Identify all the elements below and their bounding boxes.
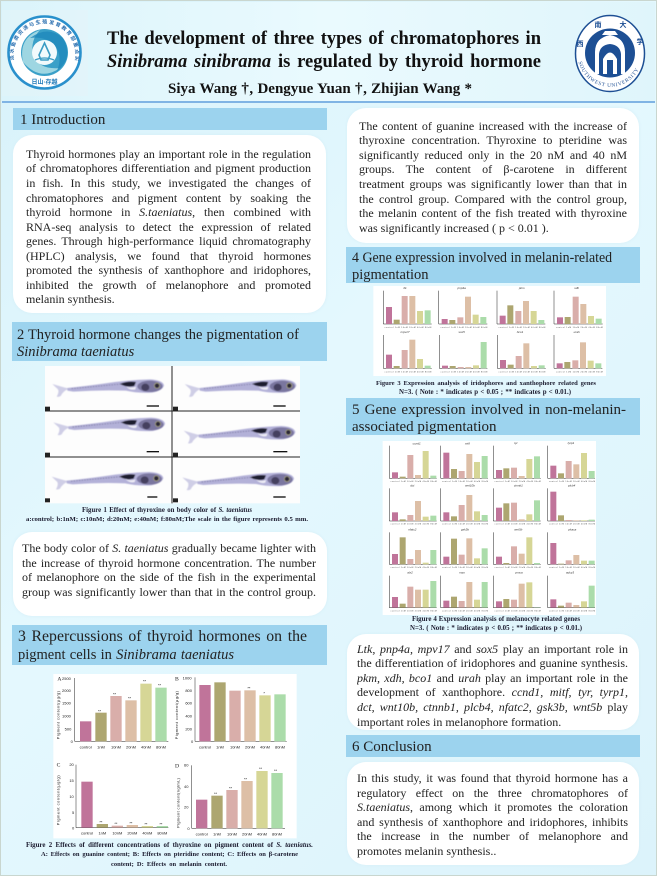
chart: pkaca: control 1nM 10nM 20nM 40nM 80nM bbox=[549, 566, 595, 569]
chart: wnt5b: wnt5b bbox=[514, 528, 523, 532]
chart: ccnd1: ccnd1 bbox=[413, 441, 421, 445]
chart D: melanin: D bbox=[175, 764, 179, 770]
chart: alx2: alx2 bbox=[407, 571, 413, 575]
chart: plcb4 bbox=[548, 484, 595, 526]
chart B: pteridine: B bbox=[175, 677, 179, 683]
chart C: beta-carotene: ** bbox=[159, 821, 163, 826]
heading: 5 Gene expression non-melanin bbox=[346, 398, 640, 435]
panel: introduction text: inhibited the growth of melanophore and promoted bbox=[26, 278, 311, 292]
heading: 3 Repercussions of thyroid hormones bbox=[12, 625, 327, 665]
chart B: pteridine: 400 bbox=[185, 714, 193, 719]
panel: gene roles text: the differentiation of iridophores and guanine synthesis. bbox=[357, 656, 628, 670]
chart C: beta-carotene: Pigment content(μg/g) bbox=[55, 775, 60, 825]
chart: pkaca bbox=[548, 528, 595, 569]
chart: mpv17 bbox=[383, 330, 432, 373]
caption: figure 2: A: Effects on guanine content; B: Effects on pteridine content; C: Effects on β-carotene bbox=[41, 851, 298, 858]
chart D: melanin: 10nM bbox=[227, 831, 237, 836]
caption: figure 3: N=3. ( Note : * indicates p < 0.05 ; ** indicates p < 0.01.) bbox=[399, 389, 571, 396]
caption: figure 1: Figure 1 Effect of thyroxine on body color of S. taeniatus bbox=[82, 507, 252, 514]
chart A: guanine: 1500 bbox=[62, 701, 72, 706]
chart: tyrp1: control 1nM 10nM 20nM 40nM 80nM bbox=[549, 480, 595, 483]
chart B: pteridine: 600 bbox=[185, 701, 193, 706]
panel: gene roles text: dct, wnt10b, ctnnb1, plcb4, nfatc2, gsk3b, wnt5b play bbox=[357, 700, 628, 714]
chart: wnt10b: wnt10b bbox=[465, 484, 475, 488]
chart A: guanine: A bbox=[57, 677, 62, 683]
heading: 2 Thyroid hormone changes the pigmentation: 2 Thyroid hormone changes the pigmentation of bbox=[17, 327, 299, 343]
chart C: beta-carotene: 20nM bbox=[127, 831, 137, 836]
heading: 3 Repercussions of thyroid hormones: pigment cells in Sinibrama taeniatus bbox=[18, 647, 234, 663]
caption: figure 4 bbox=[410, 616, 582, 632]
chart: pmca: pmca bbox=[514, 571, 523, 575]
chart: ccnd1: control 1nM 10nM 20nM 40nM 80nM bbox=[391, 480, 437, 483]
chart: wnt10b: control 1nM 10nM 20nM 40nM 80nM bbox=[442, 523, 488, 526]
panel: conclusion text: promotes melanin synthesis.. bbox=[357, 844, 496, 858]
chart: myo: myo bbox=[459, 571, 465, 575]
panel: pigment content text: groups. The content of β-carotene in different bbox=[359, 162, 627, 176]
panel: pigment content text: treatment groups was significantly lower than that in bbox=[359, 177, 627, 191]
heading: 4 Gene expression melanin-related: 4 Gene expression involved in melanin-related bbox=[352, 250, 612, 266]
chart: bco1: bco1 bbox=[517, 330, 524, 334]
chart C: beta-carotene: 5 bbox=[72, 810, 75, 815]
panel: pigment content text: significantly reduced only in the 20 nM and 40 nM bbox=[359, 148, 627, 162]
chart A: guanine: 20nM bbox=[126, 744, 136, 749]
panel a fish bbox=[45, 379, 164, 411]
chart: wnt10b bbox=[441, 484, 488, 526]
chart: mpv17: mpv17 bbox=[400, 330, 410, 334]
icon: Southwest University logo: 大 bbox=[620, 20, 626, 29]
chart D: melanin: 0 bbox=[187, 826, 190, 831]
chart D: melanin: control bbox=[196, 831, 208, 836]
chart A: guanine: Pigment content(μg/g) bbox=[55, 690, 60, 739]
panel: conclusion text: S.taeniatus, among which it promotes the coloration bbox=[357, 800, 628, 814]
icon: Southwest University logo: 西 bbox=[576, 40, 584, 48]
chart C: beta-carotene: 80nM bbox=[157, 831, 167, 836]
heading: 2 Thyroid hormone changes the pigmentation bbox=[12, 322, 327, 361]
chart C: beta-carotene: ** bbox=[99, 819, 103, 824]
chart: nfatc2: nfatc2 bbox=[408, 528, 417, 532]
chart: pkm: pkm bbox=[518, 286, 525, 290]
chart: gsk3b: control 1nM 10nM 20nM 40nM 80nM bbox=[442, 566, 488, 569]
panel: pigment content text bbox=[347, 108, 639, 243]
panel: body colour text: of melanophore on the side of the fish in the experimental bbox=[22, 570, 316, 584]
chart D: melanin: 40 bbox=[184, 784, 189, 789]
figure 4: melanocyte gene charts bbox=[382, 441, 596, 615]
chart D: melanin: 40nM bbox=[257, 831, 267, 836]
chart C: beta-carotene: 0 bbox=[72, 825, 75, 830]
chart: myo: control 1nM 10nM 20nM 40nM 80nM bbox=[442, 610, 488, 613]
panel: introduction text bbox=[13, 135, 326, 313]
panel: body colour text bbox=[13, 532, 327, 616]
chart C: beta-carotene: 15 bbox=[69, 778, 75, 783]
chart B: pteridine: * bbox=[263, 691, 265, 696]
chart: mitf: control 1nM 10nM 20nM 40nM 80nM bbox=[442, 480, 488, 483]
chart: nfatc2: control 1nM 10nM 20nM 40nM 80nM bbox=[391, 566, 437, 569]
chart C: beta-carotene: ** bbox=[129, 820, 133, 825]
chart: tyr: tyr bbox=[514, 441, 519, 445]
chart D: melanin: 20nM bbox=[242, 831, 252, 836]
heading: 5 Gene expression non-melanin: 5 Gene expression involved in non-melanin- bbox=[352, 402, 626, 418]
heading: 1 Introduction: 1 Introduction bbox=[20, 112, 105, 128]
caption: figure 2: content; D: Effects on melanin content. bbox=[111, 861, 227, 868]
icon: Southwest University logo bbox=[574, 14, 646, 92]
chart A: guanine: 1nM bbox=[97, 744, 105, 749]
figure 1: fish photographs bbox=[45, 366, 300, 504]
chart B: pteridine: 200 bbox=[185, 726, 193, 731]
chart D: melanin: ** bbox=[259, 766, 263, 771]
chart B: pteridine: 800 bbox=[185, 688, 193, 693]
chart D: melanin bbox=[175, 763, 285, 836]
icon: laboratory logo bbox=[7, 15, 82, 90]
chart: pnp4a bbox=[439, 286, 488, 329]
panel f fish bbox=[173, 473, 294, 502]
chart: wnt5b: control 1nM 10nM 20nM 40nM 80nM bbox=[495, 566, 541, 569]
chart B: pteridine: 1nM bbox=[216, 744, 224, 749]
icon: Southwest University logo: 南 bbox=[594, 20, 602, 29]
chart: pmca: control 1nM 10nM 20nM 40nM 80nM bbox=[495, 610, 541, 613]
chart D: melanin: ** bbox=[229, 785, 233, 790]
chart D: melanin: 60 bbox=[184, 763, 189, 768]
chart D: melanin: 1nM bbox=[213, 831, 221, 836]
chart: adcy3: adcy3 bbox=[566, 571, 574, 575]
panel: pigment content text: thyroxine concentration. Thyroxine to pteridine was bbox=[359, 133, 627, 147]
panel: body colour text: the increase of thyroid hormone concentration. The number bbox=[22, 556, 316, 570]
panel: body colour text: group was significantly lower than that in the control group. bbox=[22, 585, 316, 599]
chart B: pteridine: 1000 bbox=[183, 675, 192, 680]
heading: 6 Conclusion bbox=[346, 735, 640, 757]
heading: 4 Gene expression melanin-related bbox=[346, 247, 640, 283]
chart: pnp4a: pnp4a bbox=[456, 286, 466, 290]
chart: ctnnb1: control 1nM 10nM 20nM 40nM 80nM bbox=[495, 523, 541, 526]
chart A: guanine: 40nM bbox=[141, 744, 151, 749]
chart: nfatc2 bbox=[389, 528, 437, 569]
panel: gene roles text: development of xanthophore. ccnd1, mitf, tyr, tyrp1, bbox=[357, 685, 628, 699]
chart: urah: control 1nM 10nM 20nM 40nM 80nM bbox=[556, 370, 603, 373]
chart: tyrp1 bbox=[548, 441, 595, 483]
chart: dct: control 1nM 10nM 20nM 40nM 80nM bbox=[391, 523, 437, 526]
chart: bco1 bbox=[497, 330, 546, 373]
chart: gsk3b bbox=[441, 528, 488, 569]
chart A: guanine: 80nM bbox=[156, 744, 166, 749]
chart A: guanine: ** bbox=[98, 708, 102, 713]
chart A: guanine: 10nM bbox=[111, 744, 121, 749]
chart: tyrp1: tyrp1 bbox=[567, 441, 575, 445]
panel: conclusion text bbox=[347, 762, 639, 865]
panel b fish bbox=[45, 418, 165, 457]
caption: figure 3 bbox=[376, 380, 596, 396]
caption: figure 1: a:control; b:1nM; c:10nM; d:20nM; e:40nM; f:80nM;The scale in the figure represents 0.5 mm. bbox=[26, 516, 308, 523]
chart B: pteridine: control bbox=[199, 744, 211, 749]
chart B: pteridine: 10nM bbox=[230, 744, 240, 749]
panel: pigment content text: was significantly increased ( p < 0.01 ). bbox=[359, 221, 549, 235]
chart: adcy3 bbox=[548, 571, 595, 613]
chart: myo bbox=[441, 571, 488, 613]
figure 2: pigment content bar charts bbox=[53, 674, 297, 838]
panel: gene roles text bbox=[347, 634, 639, 730]
heading: 2 Thyroid hormone changes the pigmentation: Sinibrama taeniatus bbox=[17, 344, 134, 360]
heading: 6 Conclusion: 6 Conclusion bbox=[352, 739, 432, 755]
chart: dct bbox=[389, 484, 437, 526]
chart D: melanin: ** bbox=[214, 791, 218, 796]
chart: bco1: control 1nM 10nM 20nM 40nM 80nM bbox=[499, 370, 546, 373]
panel: gene roles text: pkm, xdh, bco1 and urah play an important role in the bbox=[357, 671, 628, 685]
chart C: beta-carotene: ** bbox=[144, 821, 148, 826]
chart B: pteridine: 40nM bbox=[260, 744, 270, 749]
caption: figure 2 bbox=[26, 842, 313, 868]
chart A: guanine: 1000 bbox=[62, 714, 72, 719]
chart: pkm bbox=[497, 286, 546, 329]
chart C: beta-carotene bbox=[55, 762, 168, 836]
title: The development of three types of chromatophores in bbox=[107, 29, 541, 49]
chart: ltk: ltk bbox=[404, 286, 407, 290]
chart: pkm: control 1nM 10nM 20nM 40nM 80nM bbox=[499, 326, 546, 329]
chart B: pteridine: 20nM bbox=[245, 744, 255, 749]
chart: alx2: control 1nM 10nM 20nM 40nM 80nM bbox=[391, 610, 437, 613]
panel: introduction text: melanin synthesis. bbox=[26, 292, 115, 306]
chart B: pteridine: 80nM bbox=[275, 744, 285, 749]
heading: 4 Gene expression melanin-related: pigmentation bbox=[352, 267, 429, 283]
chart B: pteridine: 0 bbox=[191, 739, 194, 744]
icon: laboratory logo: 日山·存越 bbox=[32, 78, 58, 86]
panel: conclusion text: and synthesis of xanthophore and iridophores, inhibits bbox=[357, 815, 628, 829]
caption: figure 4: Figure 4 Expression analysis of melanocyte related genes bbox=[412, 616, 580, 623]
heading: 1 Introduction bbox=[13, 108, 327, 130]
chart: gsk3b: gsk3b bbox=[461, 528, 469, 532]
chart: sox5: sox5 bbox=[458, 330, 465, 334]
chart: ltk bbox=[383, 286, 432, 329]
caption: figure 3: Figure 3 Expression analysis of iridophores and xanthophore related genes bbox=[376, 380, 596, 387]
chart: mitf: mitf bbox=[465, 441, 471, 445]
caption: figure 4: N=3. ( Note : * indicates p < 0.05 ; ** indicates p < 0.01.) bbox=[410, 625, 582, 632]
panel: gene roles text: Ltk, pnp4a, mpv17 and sox5 play an important role in bbox=[357, 642, 628, 656]
panel: conclusion text: regulatory effect on the three chromatophores of bbox=[357, 786, 628, 800]
chart C: beta-carotene: 1nM bbox=[98, 831, 106, 836]
chart A: guanine: ** bbox=[158, 683, 162, 688]
heading: 5 Gene expression non-melanin: associated pigmentation bbox=[352, 419, 497, 435]
caption: figure 1 bbox=[26, 507, 308, 523]
chart: adcy3: control 1nM 10nM 20nM 40nM 80nM bbox=[549, 610, 595, 613]
authors: Siya Wang †, Dengyue Yuan †, Zhijian Wang * bbox=[168, 81, 472, 97]
chart B: pteridine: Pigment content(μg/g) bbox=[174, 690, 179, 739]
panel: introduction text: Thyroid hormones play an important role in the regulation bbox=[26, 147, 311, 161]
panel: gene roles text: important roles in melanophore formation. bbox=[357, 715, 561, 729]
panel: conclusion text: In this study, it was found that thyroid hormone has a bbox=[357, 771, 628, 785]
chart: xdh bbox=[554, 286, 603, 329]
chart C: beta-carotene: C bbox=[57, 763, 61, 769]
chart: xdh: xdh bbox=[573, 286, 579, 290]
chart: sox5 bbox=[439, 330, 488, 373]
panel: pigment content text: the control group. Compared with the control group, bbox=[359, 192, 627, 206]
header band bbox=[2, 2, 655, 103]
chart: alx2 bbox=[389, 571, 437, 613]
icon: Southwest University logo: SOUTHWEST UNIVERSITY bbox=[578, 62, 638, 87]
chart B: pteridine: ** bbox=[247, 686, 251, 691]
figure 3: iridophore and xanthophore gene charts bbox=[373, 286, 606, 376]
panel: pigment content text: The content of guanine increased with the increase of bbox=[359, 119, 627, 133]
panel c fish bbox=[45, 472, 163, 502]
chart: mpv17: control 1nM 10nM 20nM 40nM 80nM bbox=[385, 370, 432, 373]
icon: Southwest University logo: 学 bbox=[636, 37, 644, 46]
panel: introduction text: of chromatophores differentiation and pigment production bbox=[26, 161, 311, 175]
chart: pkaca: pkaca bbox=[567, 528, 577, 532]
chart A: guanine: 2000 bbox=[62, 688, 72, 693]
chart D: melanin: 80nM bbox=[272, 831, 282, 836]
chart B: pteridine bbox=[174, 675, 287, 749]
chart: tyr: control 1nM 10nM 20nM 40nM 80nM bbox=[495, 480, 541, 483]
chart: pmca bbox=[493, 571, 541, 613]
chart: ltk: control 1nM 10nM 20nM 40nM 80nM bbox=[385, 326, 432, 329]
panel: introduction text: RNA-seq analysis to detect the expression of related bbox=[26, 220, 311, 234]
panel: pigment content text: the melanin content of the fish treated with thyroxine bbox=[359, 206, 627, 220]
chart C: beta-carotene: control bbox=[81, 831, 93, 836]
chart: xdh: control 1nM 10nM 20nM 40nM 80nM bbox=[556, 326, 603, 329]
title: Sinibrama sinibrama is regulated by thyroid hormone bbox=[107, 52, 541, 72]
caption: figure 2: Figure 2 Effects of different concentrations of thyroxine on pigment content of S. taeniatus. bbox=[26, 842, 313, 849]
panel: body colour text: The body color of S. taeniatus gradually became lighter with bbox=[22, 541, 316, 555]
panel: conclusion text: the increase in the number of melanophore and bbox=[357, 829, 628, 843]
panel d fish bbox=[173, 379, 296, 411]
chart C: beta-carotene: 10 bbox=[69, 794, 75, 799]
chart: ccnd1 bbox=[389, 441, 437, 483]
panel: introduction text: (HPLC) analysis, we found that thyroid hormones bbox=[26, 249, 311, 263]
panel: introduction text: genes. Through high-performance liquid chromatography bbox=[26, 234, 311, 248]
panel: introduction text: in fish. In this study, we investigated the changes of bbox=[26, 176, 311, 190]
chart: urah: urah bbox=[574, 330, 580, 334]
chart A: guanine: control bbox=[80, 744, 92, 749]
chart C: beta-carotene: 40nM bbox=[142, 831, 152, 836]
chart: ctnnb1: ctnnb1 bbox=[514, 484, 523, 488]
chart: ctnnb1 bbox=[493, 484, 541, 526]
chart A: guanine: 0 bbox=[71, 739, 74, 744]
chart: tyr bbox=[493, 441, 541, 483]
panel: introduction text: promoted the synthesis of xanthophore and iridophores, bbox=[26, 263, 311, 277]
panel: introduction text: chromatophores and pigment content by soaking the bbox=[26, 191, 311, 205]
chart: plcb4: plcb4 bbox=[567, 484, 576, 488]
chart A: guanine: 500 bbox=[65, 726, 72, 731]
chart: urah bbox=[554, 330, 603, 373]
chart C: beta-carotene: 20 bbox=[69, 762, 75, 767]
chart: dct: dct bbox=[410, 484, 414, 488]
panel e fish bbox=[173, 426, 295, 457]
chart: mitf bbox=[441, 441, 488, 483]
chart: plcb4: control 1nM 10nM 20nM 40nM 80nM bbox=[549, 523, 595, 526]
chart A: guanine: ** bbox=[113, 691, 117, 696]
chart A: guanine: 2500 bbox=[62, 676, 72, 681]
chart D: melanin: ** bbox=[274, 768, 278, 773]
chart D: melanin: 20 bbox=[184, 805, 189, 810]
panel: introduction text: thyroid hormone in S.taeniatus, then combined with bbox=[26, 205, 311, 219]
chart C: beta-carotene: 10nM bbox=[112, 831, 122, 836]
chart D: melanin: Pigment content(ng/mL) bbox=[175, 777, 180, 828]
chart A: guanine bbox=[55, 676, 168, 749]
chart C: beta-carotene: ** bbox=[114, 821, 118, 826]
chart A: guanine: ** bbox=[128, 696, 132, 701]
chart A: guanine: ** bbox=[143, 679, 147, 684]
chart: wnt5b bbox=[493, 528, 541, 569]
chart: sox5: control 1nM 10nM 20nM 40nM 80nM bbox=[441, 370, 488, 373]
title bbox=[107, 29, 541, 72]
chart D: melanin: ** bbox=[244, 776, 248, 781]
chart: pnp4a: control 1nM 10nM 20nM 40nM 80nM bbox=[441, 326, 488, 329]
